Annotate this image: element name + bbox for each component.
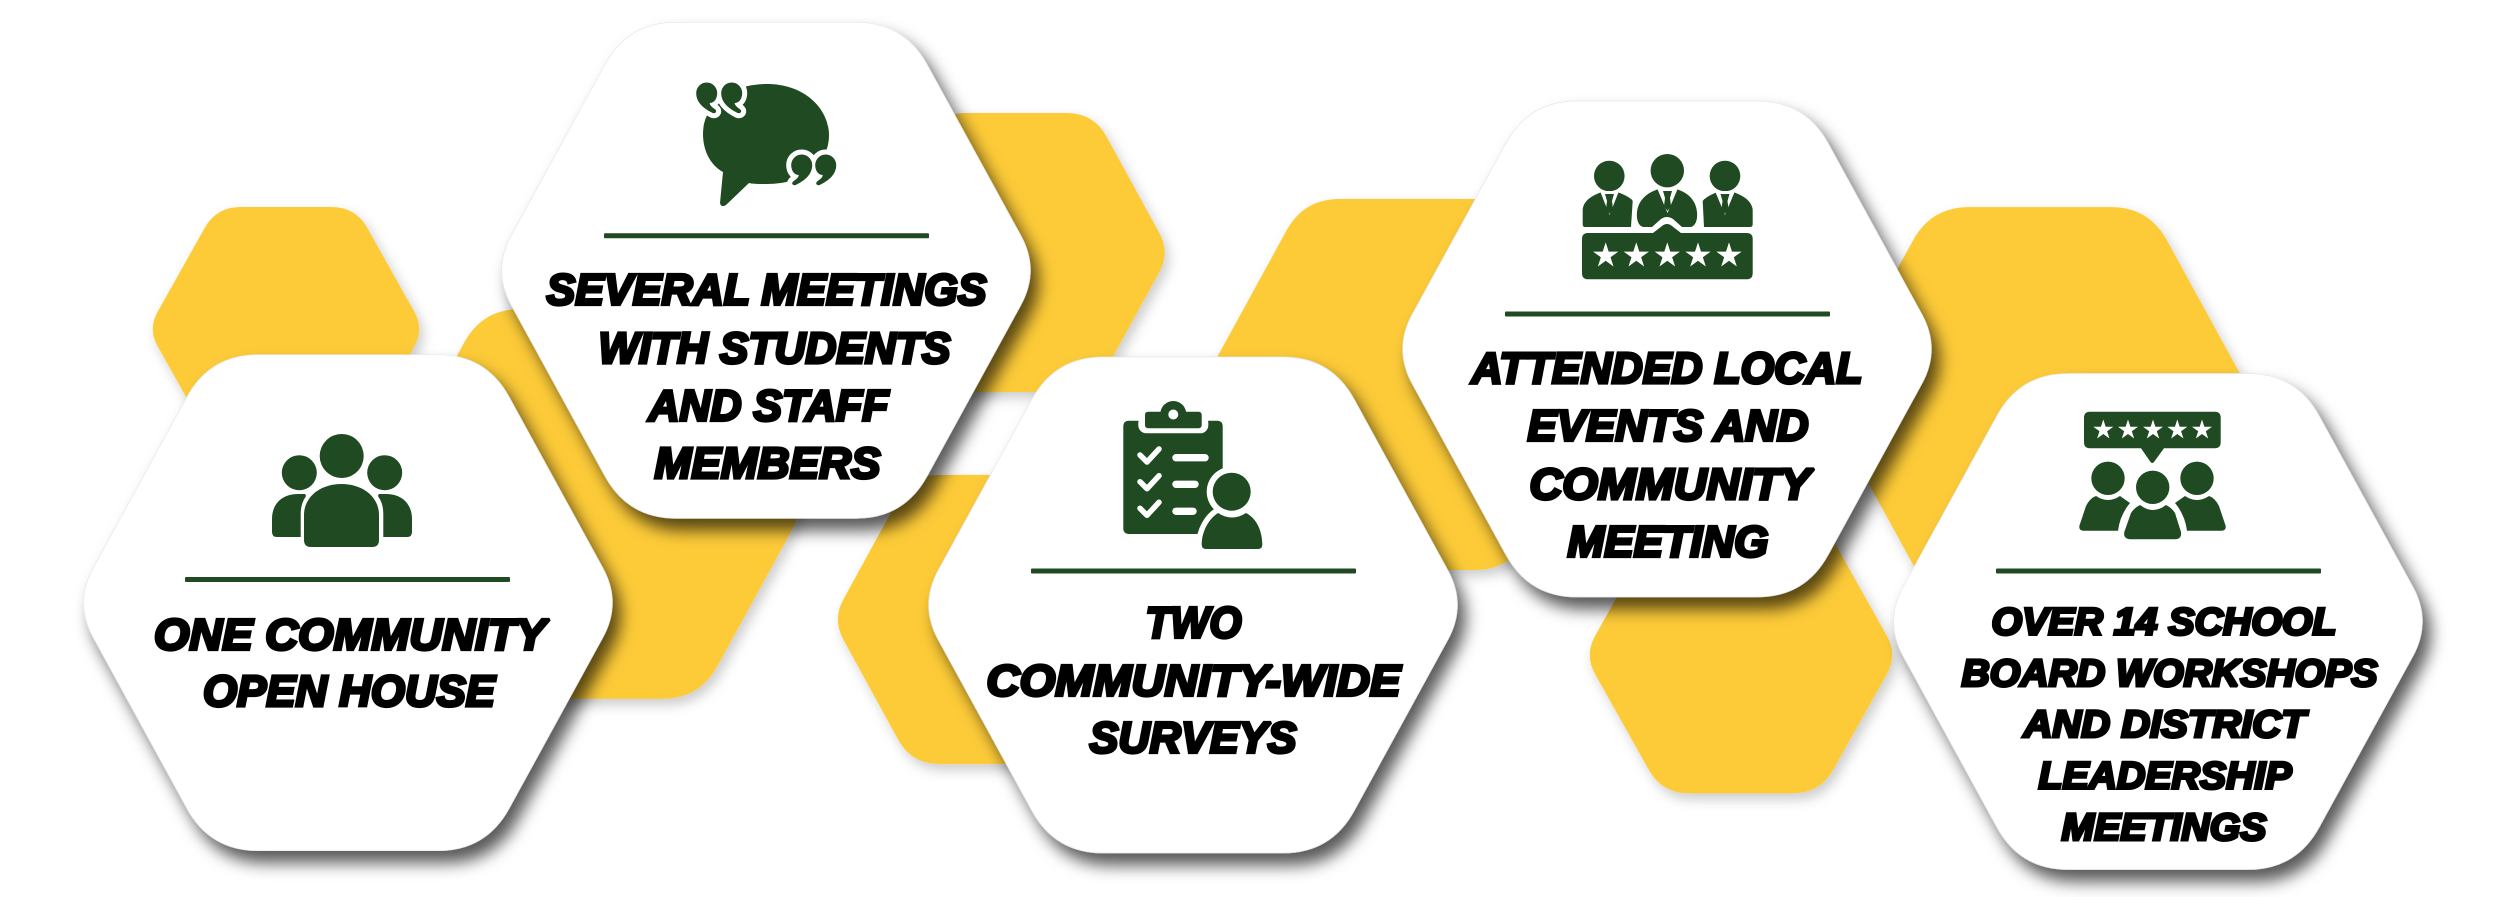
divider xyxy=(1996,568,2321,574)
panel background hexagon xyxy=(1894,374,2422,870)
panel: one community open house xyxy=(84,355,612,851)
label: ATTENDED LOCAL xyxy=(1471,344,1862,393)
yellow hexagon 7 xyxy=(1832,207,2248,598)
panel background hexagon xyxy=(1403,101,1931,597)
panel: over 14 school board workshops xyxy=(1894,374,2422,870)
label: WITH STUDENTS xyxy=(598,324,950,373)
panel: attended local events xyxy=(1403,101,1931,597)
icon: group with rating bubble xyxy=(2079,412,2226,539)
divider xyxy=(1031,568,1356,574)
divider xyxy=(185,577,510,582)
panel background hexagon xyxy=(84,355,612,851)
rating stars xyxy=(2093,420,2212,438)
label: OVER 14 SCHOOL xyxy=(1992,602,2336,644)
divider xyxy=(604,233,929,238)
panel background hexagon xyxy=(929,357,1457,853)
label: BOARD WORKSHOPS xyxy=(1962,653,2378,695)
label: LEADERSHIP xyxy=(2038,756,2292,798)
yellow hexagon 5 xyxy=(1209,199,1605,570)
label: AND DISTRICT xyxy=(2022,704,2308,746)
label xyxy=(1962,602,2378,849)
label: OPEN HOUSE xyxy=(203,667,497,716)
label xyxy=(1471,344,1862,566)
label: MEETINGS xyxy=(2062,807,2266,849)
panel: several meetings with students and staff xyxy=(502,22,1030,518)
label: ONE COMMUNITY xyxy=(154,610,550,660)
label: SURVEYS xyxy=(1090,714,1296,762)
rating stars xyxy=(1593,242,1742,266)
icon: community group xyxy=(272,434,412,547)
label xyxy=(546,266,986,488)
icon: clipboard checklist and person xyxy=(1123,401,1262,549)
label: COMMUNITY-WIDE xyxy=(986,656,1402,705)
divider xyxy=(1505,312,1830,316)
panel: two community-wide surveys xyxy=(929,357,1457,853)
yellow hexagon 6 xyxy=(1590,517,1892,793)
yellow hexagon 1 xyxy=(153,207,419,451)
label: EVENTS AND xyxy=(1528,402,1808,451)
panel background hexagon xyxy=(502,22,1030,518)
label: AND STAFF xyxy=(648,382,890,431)
yellow hexagon 3 xyxy=(867,113,1165,392)
label xyxy=(154,610,550,716)
label: TWO xyxy=(1146,598,1242,648)
icon: panel of people with five-star rating xyxy=(1582,154,1753,279)
label: MEETING xyxy=(1568,517,1768,566)
label: SEVERAL MEETINGS xyxy=(546,266,986,314)
label: COMMUNITY xyxy=(1530,460,1814,509)
yellow hexagon 4 xyxy=(838,475,1146,764)
yellow hexagon 2 xyxy=(383,309,799,699)
icon: speech bubble with quotes xyxy=(696,82,836,206)
label xyxy=(986,598,1402,762)
label: MEMBERS xyxy=(654,439,880,488)
